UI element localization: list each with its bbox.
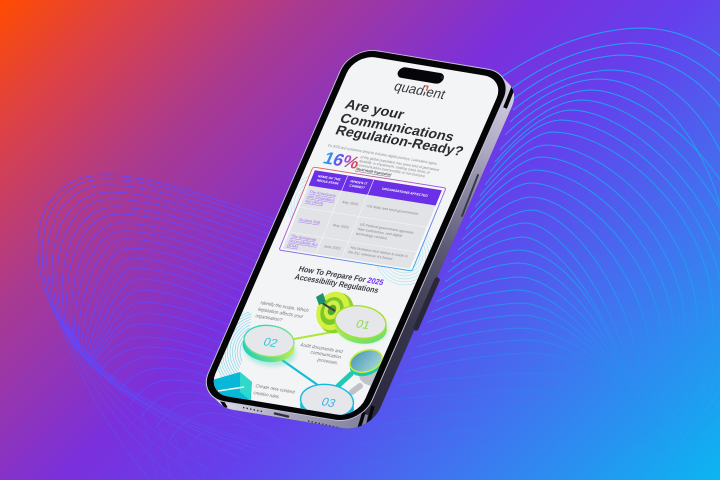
phone [206,50,514,428]
table header [309,170,442,206]
icon: magnifying glass [338,346,389,392]
background wave lines: right [340,28,720,480]
step 2 disc: 02 [261,335,280,350]
side buttons [416,175,478,328]
connector lines [282,332,332,385]
step 1 text: organisation? [254,313,283,323]
step 3 text: Create new content [254,383,296,396]
row 2: their contractors, and digital [357,227,403,238]
row 3: Accessibility Act [288,238,319,247]
logo: quadient [392,78,448,102]
header labels: ORGANISATIONS AFFECTED [381,187,429,198]
row 3 [286,234,408,260]
row 1: Act (ADA) [305,198,325,206]
row 3: (EAA) [286,243,300,249]
statistic description: disability or impairment, making some forms of [358,158,431,175]
step 3 disc: 03 [319,395,338,410]
decorative arcs around step 2 [218,312,252,378]
table body [283,186,436,268]
icon: target with dart [316,292,354,334]
step 2 disc [241,323,298,369]
step 2 text [300,343,344,364]
16% statistic: 16% [320,148,363,172]
step 2 text: Audit documents and [299,342,344,355]
intro line: It's 2025 and customers deserve inclusive digital journeys. Lawmakers agree. [327,143,439,166]
step 3 text: creation rules. [252,390,281,400]
statistic description: of the global population has some kind of permanent [360,154,441,172]
row 2: May 2025 [332,223,349,229]
table frame [279,167,446,271]
row 1: The Americans [308,189,337,198]
regulation table [279,167,446,271]
header labels [316,175,428,197]
title [336,100,464,156]
row 1: May 2025 [342,200,359,206]
row 2: Section 508 [298,217,322,225]
step 1 disc: 01 [354,317,373,332]
title: Regulation-Ready? [333,122,466,159]
icon: teal block [214,372,252,400]
title: Are your [343,96,408,122]
row 3: Any business that wishes to trade in [350,246,408,258]
step 3 disc [300,384,354,415]
header labels: COMING? [349,184,366,190]
section heading: Accessibility Regulations [293,273,380,295]
row 1: US state and local governments [367,204,419,216]
row 3: June 2025 [323,244,341,251]
black bezel [198,46,515,424]
notch [396,66,446,85]
step 1 text [256,300,309,322]
statistic description: (World Health Organization) [355,166,393,177]
row 2: US Federal government agencies, [359,223,415,235]
row 3: the EU, wherever it's based [348,250,393,261]
statistic description: communication inaccessible or not inclusive [357,162,426,178]
header labels: WHEN'S IT [350,179,368,186]
logo [394,84,446,100]
header labels: NAME OF THE [317,174,342,182]
speaker and port [243,408,340,428]
bottom edge of the frame [214,398,368,428]
step 1 disc [334,305,390,345]
row 2: technology vendors [355,232,388,240]
screen background [214,57,498,415]
row 1: with Disabilities [307,194,336,203]
step 2 text: processes. [316,357,339,366]
row 2 [298,218,414,240]
phone side frame [214,78,514,428]
title: Communications [338,110,457,144]
antenna bands [218,88,513,432]
decorative arcs beside table [288,175,435,285]
header labels: REGULATION [316,179,340,186]
step 2 text: communication [309,350,342,360]
row 3: The European [290,233,317,242]
step 1 text: Identify the scope. Which [259,300,310,314]
screen [214,57,498,415]
row 1 [304,190,418,215]
background wave lines: left [38,175,320,480]
section heading: How To Prepare For 2025 [297,265,385,287]
step 1 text: legislation affects your [257,307,304,320]
